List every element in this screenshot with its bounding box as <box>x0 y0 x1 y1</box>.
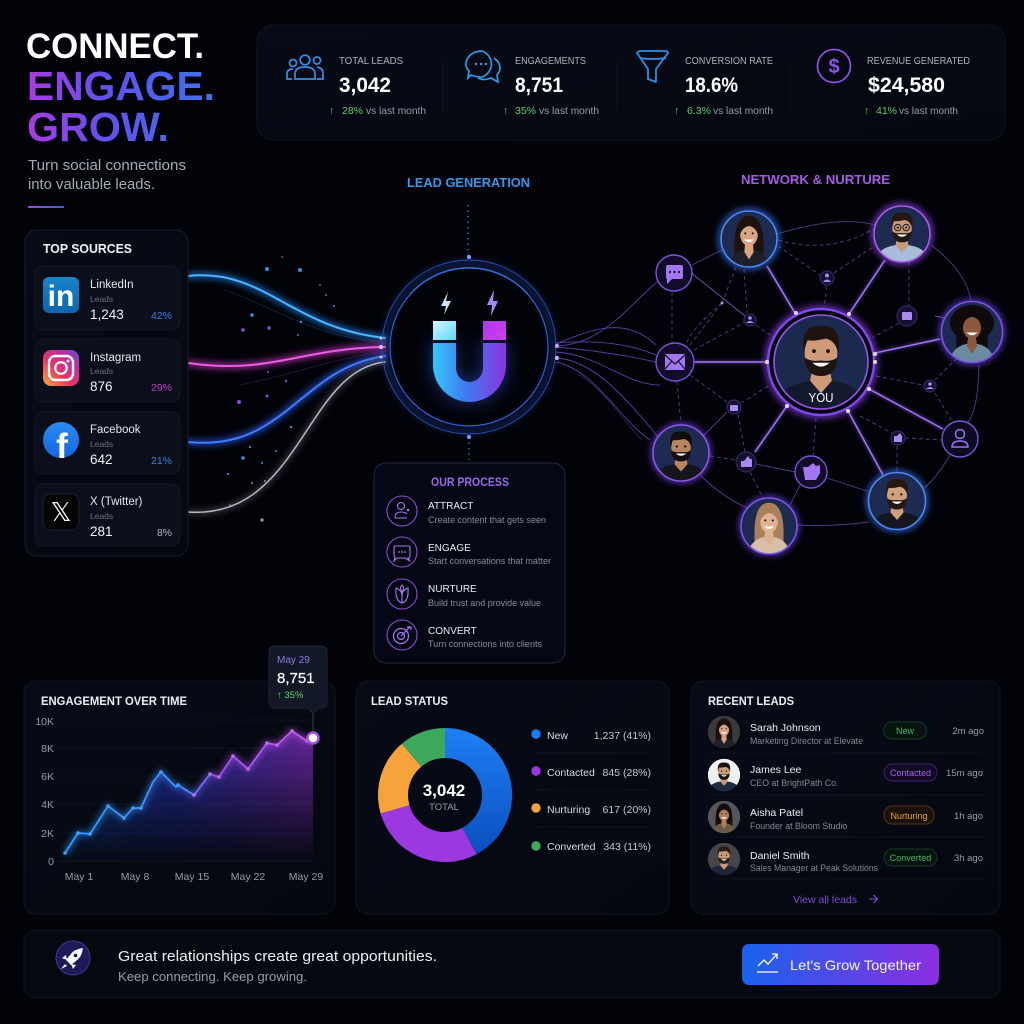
icon node: user <box>942 421 978 457</box>
source: linkedin: Leads <box>90 294 113 304</box>
thick links to you <box>694 260 943 475</box>
step: nurture: NURTURE <box>428 584 477 595</box>
lead: james lee: CEO at BrightPath Co. <box>750 778 838 788</box>
panel: engagement over time: ENGAGEMENT OVER TIME <box>41 694 187 708</box>
legend: 845 (28%) <box>603 767 651 779</box>
stat: engagements: ENGAGEMENTS <box>515 56 586 67</box>
x axis labels: May 8 <box>121 871 149 883</box>
source: x twitter: Leads <box>90 511 113 521</box>
y axis labels: 8K <box>41 743 54 755</box>
step: attract <box>387 496 546 526</box>
thin and dashed links <box>672 222 979 526</box>
person: bottom woman <box>741 498 797 556</box>
panel: engagement over time <box>24 646 335 914</box>
source: linkedin <box>35 266 180 330</box>
stat: revenue generated <box>818 50 970 117</box>
source: facebook <box>35 412 180 474</box>
y axis labels: 2K <box>41 828 54 840</box>
legend: 617 (20%) <box>603 804 651 816</box>
magnet glow <box>433 343 506 402</box>
lead: daniel smith <box>708 843 983 876</box>
step: convert <box>387 620 543 650</box>
person: right woman <box>941 301 1003 364</box>
subtitle: into valuable leads. <box>28 177 155 193</box>
source: x twitter: 𝕏 <box>51 498 71 528</box>
stat: conversion rate: vs last month <box>713 105 773 117</box>
title underline <box>28 206 64 208</box>
icon node: chat <box>656 255 692 291</box>
source: instagram: 876 <box>90 379 113 394</box>
title: GROW. <box>27 104 169 150</box>
stat: conversion rate: ↑ <box>674 105 679 117</box>
panel: call to action <box>24 930 1000 998</box>
source: linkedin: in <box>48 280 74 313</box>
panel: our process <box>374 463 565 663</box>
lead: daniel smith: Converted <box>890 853 931 863</box>
icon node: mail <box>656 343 694 381</box>
panel: recent leads <box>691 681 1000 914</box>
source: facebook: 21% <box>151 455 172 467</box>
heading: network and nurture: NETWORK & NURTURE <box>741 173 890 187</box>
panel: call to action: Keep connecting. Keep growing. <box>118 970 307 984</box>
step: convert: CONVERT <box>428 626 477 637</box>
donut chart: 3,042 <box>423 781 465 800</box>
stat: conversion rate: 18.6% <box>685 74 738 97</box>
legend: Nurturing <box>547 804 590 816</box>
step: attract: Create content that gets seen <box>428 515 546 525</box>
source: x twitter <box>35 484 180 546</box>
heading: lead generation: LEAD GENERATION <box>407 176 530 190</box>
y axis labels: 6K <box>41 771 54 783</box>
y axis labels: 4K <box>41 799 54 811</box>
x axis labels: May 1 <box>65 871 93 883</box>
stat: revenue generated: $24,580 <box>868 74 945 97</box>
stat: revenue generated: $ <box>828 56 840 78</box>
source: facebook: Facebook <box>90 424 141 436</box>
stat: engagements <box>466 51 599 117</box>
panel: recent leads: RECENT LEADS <box>708 694 794 708</box>
panel: top sources <box>25 230 188 556</box>
tooltip <box>269 646 327 714</box>
lead: daniel smith: Daniel Smith <box>750 850 810 862</box>
icon: lightning bolts <box>441 290 498 316</box>
panel: our process: OUR PROCESS <box>431 477 509 489</box>
panel: lead status <box>356 681 669 914</box>
stat: total leads <box>287 55 426 117</box>
person: bottom right man <box>868 472 926 531</box>
dotted connector above magnet <box>467 205 469 257</box>
x axis labels <box>65 871 323 883</box>
source: x twitter: 8% <box>157 527 172 539</box>
lead: sarah johnson <box>708 716 984 749</box>
source: linkedin: 1,243 <box>90 307 124 322</box>
you node: YOU <box>808 390 834 405</box>
legend: Contacted <box>547 767 595 779</box>
stat: revenue generated: 41% <box>876 105 897 117</box>
small nodes <box>720 271 936 472</box>
icon: magnet <box>433 321 506 402</box>
lead: aisha patel: Aisha Patel <box>750 807 803 819</box>
button: Let's Grow Together <box>790 957 921 973</box>
view all leads link: View all leads <box>793 894 857 906</box>
donut chart: TOTAL <box>429 802 459 813</box>
stat: revenue generated: vs last month <box>899 105 958 117</box>
you node <box>765 309 877 415</box>
source: facebook: 642 <box>90 452 113 467</box>
legend: 1,237 (41%) <box>594 730 651 742</box>
panel: call to action: Great relationships create great opportunities. <box>118 948 437 965</box>
person: left man <box>653 425 709 483</box>
x axis labels: May 22 <box>231 871 265 883</box>
source: linkedin: LinkedIn <box>90 279 133 291</box>
title: ENGAGE. <box>27 63 215 109</box>
stat: revenue generated: REVENUE GENERATED <box>867 56 970 67</box>
y axis labels: 10K <box>35 716 54 728</box>
stat: total leads: 3,042 <box>339 74 391 97</box>
stat: conversion rate: 6.3% <box>687 105 711 117</box>
source: facebook: f <box>56 427 68 466</box>
lead: james lee: 15m ago <box>946 768 983 779</box>
stat: revenue generated: ↑ <box>864 105 869 117</box>
tooltip: May 29 <box>277 655 310 666</box>
button <box>742 944 939 985</box>
x axis labels: May 15 <box>175 871 209 883</box>
icon node: like <box>795 456 827 488</box>
step: engage <box>387 537 551 567</box>
lead: aisha patel: 1h ago <box>954 811 983 822</box>
step: convert: Turn connections into clients <box>428 639 543 649</box>
flow lines from sources to magnet <box>188 275 385 512</box>
legend: 343 (11%) <box>603 841 651 853</box>
lead: aisha patel: Nurturing <box>890 811 928 821</box>
dotted connector below magnet <box>468 437 470 460</box>
person: top left woman <box>720 210 778 269</box>
person: top right man <box>873 205 931 264</box>
line chart <box>63 712 319 861</box>
fan lines from magnet to network <box>556 281 660 440</box>
source: instagram: 29% <box>151 382 172 394</box>
step: nurture <box>387 579 541 609</box>
icon: rocket <box>56 941 90 975</box>
lead: james lee: Contacted <box>890 768 931 778</box>
tooltip: 8,751 <box>277 670 315 687</box>
source: x twitter: 281 <box>90 524 113 539</box>
stat: engagements: vs last month <box>539 105 599 117</box>
lead: daniel smith: Sales Manager at Peak Solutions <box>750 863 879 873</box>
step: attract: ATTRACT <box>428 501 473 512</box>
lead: aisha patel: Founder at Bloom Studio <box>750 821 847 831</box>
donut chart <box>378 728 512 862</box>
network graph <box>653 205 1003 556</box>
lead: sarah johnson: Sarah Johnson <box>750 722 821 734</box>
lead: sarah johnson: Marketing Director at Elevate <box>750 736 863 746</box>
subtitle: Turn social connections <box>28 158 186 174</box>
y axis labels <box>35 716 54 868</box>
lead: sarah johnson: New <box>896 726 914 736</box>
source: instagram <box>35 339 180 402</box>
lead: daniel smith: 3h ago <box>954 853 983 864</box>
stat: engagements: 35% <box>515 105 536 117</box>
lead: james lee <box>708 759 983 792</box>
stat: total leads: ↑ <box>329 105 334 117</box>
magnet hub <box>379 255 559 439</box>
panel: lead status: LEAD STATUS <box>371 694 448 708</box>
legend: New <box>547 730 568 742</box>
x axis labels: May 29 <box>289 871 323 883</box>
panel: stats <box>257 25 1005 140</box>
stat: total leads: vs last month <box>366 105 426 117</box>
step: nurture: Build trust and provide value <box>428 598 541 608</box>
source: x twitter: X (Twitter) <box>90 496 143 508</box>
lead: aisha patel <box>708 801 983 834</box>
lead: sarah johnson: 2m ago <box>952 726 984 737</box>
lead: james lee: James Lee <box>750 764 802 776</box>
step: engage: ENGAGE <box>428 543 471 554</box>
source: instagram: Instagram <box>90 352 141 364</box>
stat: total leads: TOTAL LEADS <box>339 56 403 67</box>
panel: top sources: TOP SOURCES <box>43 242 132 256</box>
title: CONNECT. <box>26 27 204 66</box>
stat: engagements: 8,751 <box>515 74 563 97</box>
legend <box>531 729 652 853</box>
step: engage: Start conversations that matter <box>428 556 551 566</box>
stat: total leads: 28% <box>342 105 363 117</box>
source: facebook: Leads <box>90 439 113 449</box>
subtitle <box>28 158 186 193</box>
source: linkedin: 42% <box>151 310 172 322</box>
stat: engagements: ↑ <box>503 105 508 117</box>
particles <box>227 256 335 522</box>
legend: Converted <box>547 841 596 853</box>
stat: conversion rate <box>637 51 773 117</box>
title <box>26 27 215 150</box>
y axis labels: 0 <box>48 856 54 868</box>
tooltip: ↑ 35% <box>277 690 304 701</box>
source: instagram: Leads <box>90 366 113 376</box>
stat: conversion rate: CONVERSION RATE <box>685 56 773 67</box>
